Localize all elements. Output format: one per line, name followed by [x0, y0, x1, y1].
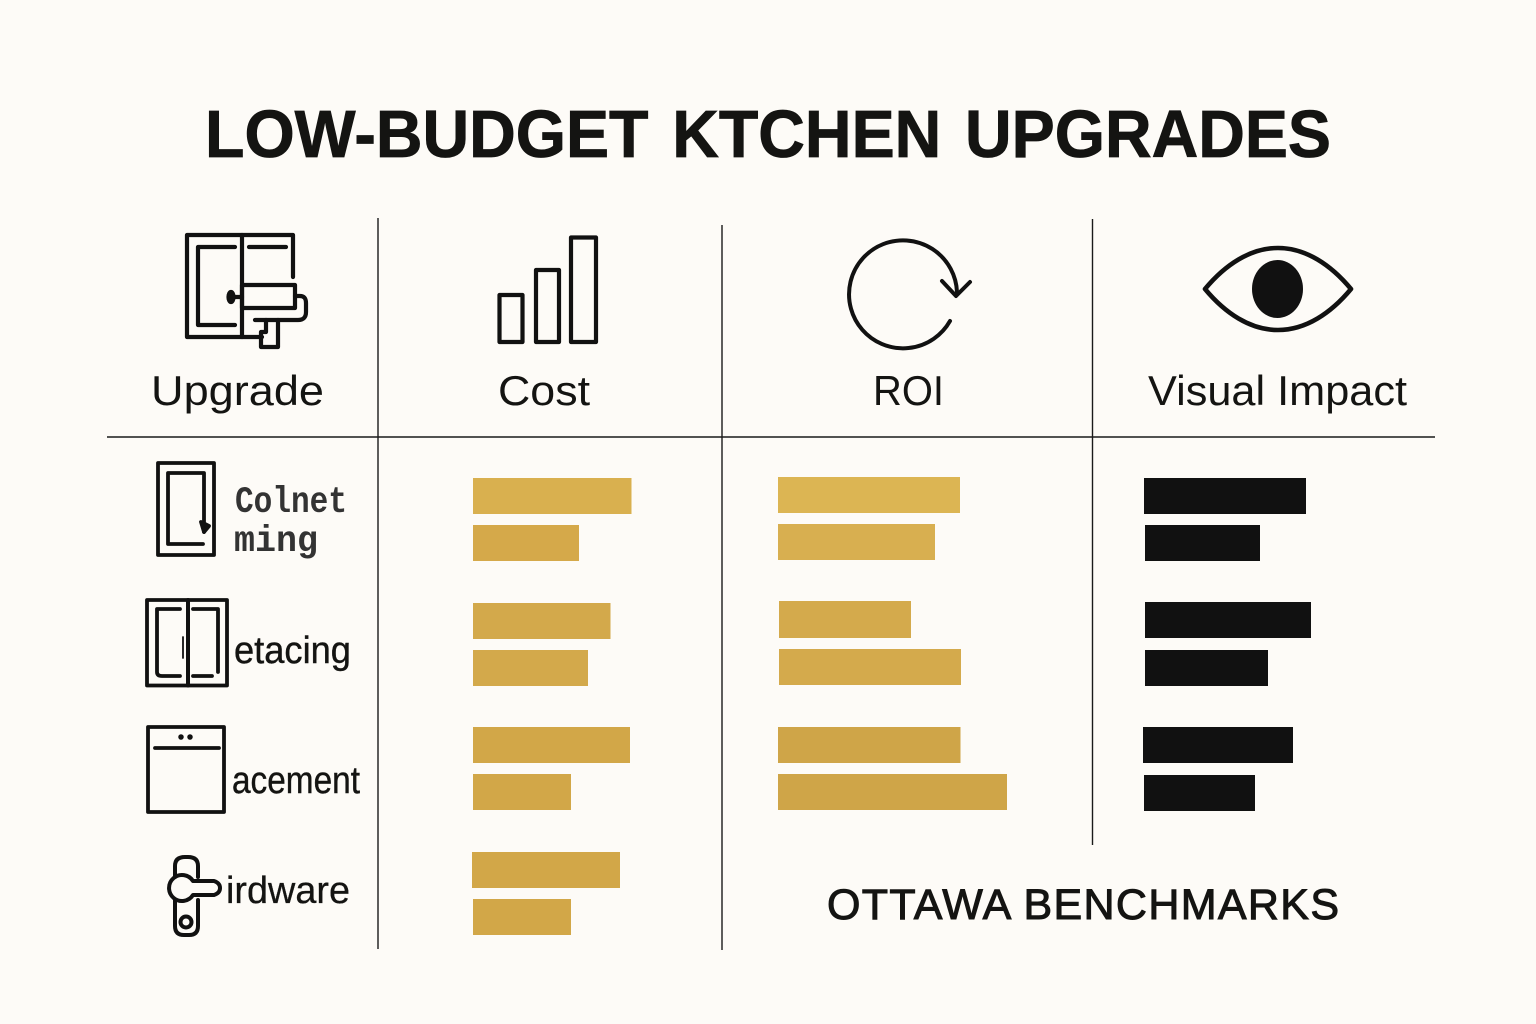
row 3: replacement [148, 727, 1293, 812]
label: refacing: etacing [234, 630, 351, 672]
icon: double door [147, 600, 227, 686]
visual impact bars [1143, 727, 1293, 811]
row 1: cabinet painting [158, 463, 1306, 563]
row 4: hardware [169, 852, 620, 935]
heading: cost: Cost [498, 367, 590, 414]
label: cabinet painting: ming [234, 521, 318, 563]
cost bars [473, 478, 632, 561]
heading: visual impact: Visual Impact [1148, 367, 1407, 414]
heading: upgrade: Upgrade [151, 367, 324, 414]
cost bars [472, 852, 620, 935]
caption: ottawa benchmarks: OTTAWA BENCHMARKS [827, 881, 1339, 929]
label: hardware: irdware [226, 870, 350, 912]
row 2: refacing [147, 600, 1311, 686]
icon: cabinet door [158, 463, 214, 555]
heading: roi: ROI [873, 367, 944, 414]
icon: door handle [169, 857, 220, 935]
title: LOW-BUDGET KTCHEN UPGRADES [205, 97, 1331, 172]
cost bars [473, 603, 610, 686]
cost bars [473, 727, 630, 810]
icon: oven panel [148, 727, 224, 812]
icon: cabinet and paint roller [187, 235, 306, 347]
roi bars [778, 477, 960, 560]
icon: rising bars [500, 238, 596, 342]
icon: eye [1205, 248, 1351, 330]
roi bars [778, 727, 1007, 810]
label: replacement: acement [232, 760, 360, 802]
icon: circular arrow [849, 240, 970, 348]
label: cabinet painting: Colnet [235, 482, 347, 524]
roi bars [779, 601, 961, 685]
label: cabinet painting [234, 482, 347, 563]
visual impact bars [1144, 478, 1306, 561]
visual impact bars [1145, 602, 1311, 686]
